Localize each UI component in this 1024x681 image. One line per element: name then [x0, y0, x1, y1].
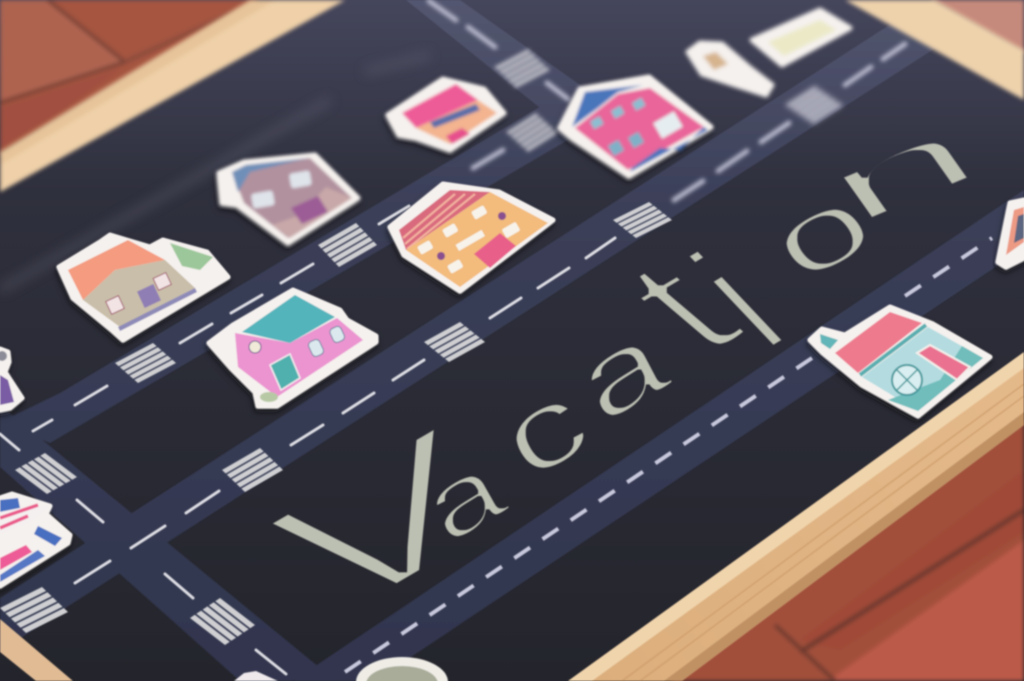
tiles: bottom right	[670, 420, 1024, 681]
crosswalk: top street	[494, 49, 550, 88]
house: left edge figure	[0, 349, 22, 410]
tiles: top left	[0, 0, 260, 155]
house: bottom edge fragments	[234, 657, 448, 681]
house: green bottom right	[810, 307, 990, 416]
frame: bottom right rail	[568, 352, 1024, 681]
dashes: lower thin road	[345, 238, 992, 672]
tiles: top right	[930, 0, 1024, 54]
chalk letters: small	[404, 164, 895, 564]
dashes: main road	[75, 238, 615, 583]
house: pink with teal roof	[209, 290, 376, 406]
road: cross street lower left	[0, 405, 320, 681]
crosswalk: cross street upper	[15, 453, 77, 494]
frame: top right rail	[845, 0, 1024, 100]
crosswalk: upper road middle	[318, 223, 377, 267]
crosswalk: main road far	[785, 86, 843, 124]
chalk letters: small: a	[404, 431, 523, 564]
dashes: cross streets	[0, 434, 286, 674]
chalk letters: small: c	[479, 356, 608, 503]
chalk letters: large: i	[651, 217, 824, 383]
crosswalks	[0, 49, 843, 645]
chalk letters: large: n	[800, 96, 1000, 246]
crosswalk: main road right	[613, 202, 672, 238]
house: small pink	[388, 79, 504, 150]
chalk letters: large	[583, 96, 1000, 383]
house: awning shop lower left	[0, 494, 70, 586]
dashes: far, out of focus	[429, 1, 905, 200]
chalk letters: small: a	[557, 296, 686, 446]
chalk letters: large: t	[583, 229, 779, 383]
house: signpost	[688, 43, 772, 95]
house: grey purple	[219, 155, 358, 243]
road: upper diagonal	[0, 95, 585, 443]
chalk letters: small: o	[745, 164, 895, 302]
crosswalk: upper road far	[506, 113, 558, 152]
road: lower thin diagonal	[293, 190, 1024, 681]
frame: bottom left rail	[0, 619, 73, 681]
house: fence top right	[752, 10, 850, 65]
house: blue roof	[560, 77, 711, 176]
house: orange roof with tree	[59, 235, 228, 340]
crosswalk: main road left	[222, 448, 283, 492]
chalk word	[242, 96, 1000, 668]
crosswalk: main road far left	[0, 587, 68, 633]
road: cross street top	[406, 0, 590, 120]
dashes: upper road	[33, 206, 409, 431]
house: right edge	[998, 200, 1024, 267]
chalk smudges	[0, 55, 430, 290]
crosswalk: main road centre	[424, 322, 485, 362]
frame: top left rail	[0, 0, 345, 192]
chalk letter: V: V	[242, 386, 519, 668]
crosswalk: cross street lower	[190, 598, 255, 645]
crosswalk: upper road left	[115, 343, 176, 383]
house: orange yellow	[390, 184, 553, 291]
